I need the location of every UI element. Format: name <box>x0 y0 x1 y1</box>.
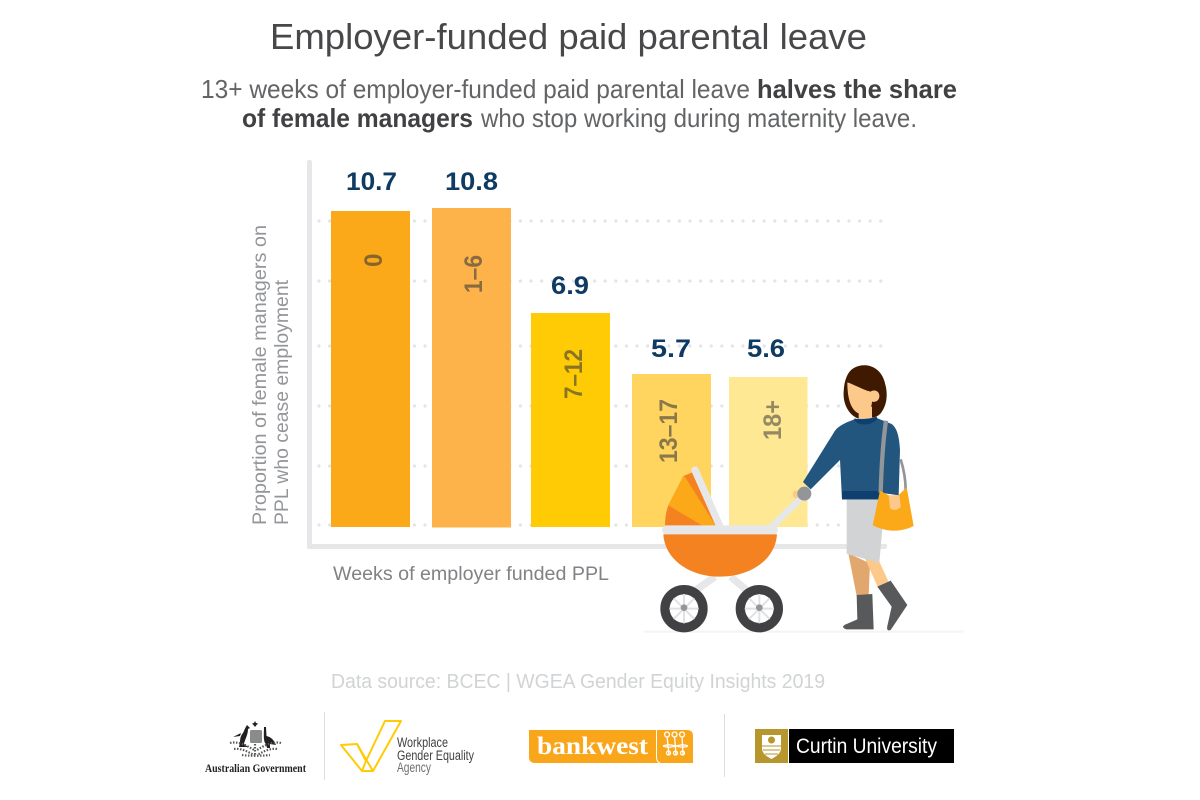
bar: 13-17 weeks <box>632 335 711 527</box>
logo: Bankwest: bankwest <box>537 733 649 760</box>
icon: bankwest symbol <box>663 732 688 755</box>
divider: government and WGEA <box>324 712 325 780</box>
bar: 7-12 weeks: 7–12 <box>560 349 588 399</box>
logo: Workplace Gender Equality Agency: Gender Equality <box>397 748 474 763</box>
logo: Curtin University <box>755 729 954 763</box>
subtitle <box>201 74 957 133</box>
bag <box>873 487 914 531</box>
bar: 1-6 weeks: 10.8 <box>445 168 498 196</box>
y axis label: PPL who cease employment <box>271 279 293 525</box>
subtitle: 13+ weeks of employer-funded paid parental leave <box>201 74 750 104</box>
y axis label: Proportion of female managers on <box>249 225 271 525</box>
logo: Workplace Gender Equality Agency: Agency <box>397 760 431 775</box>
hair back <box>844 365 887 419</box>
bar: 18+ weeks: 18+ <box>759 400 787 440</box>
bar: 13-17 weeks: 13–17 <box>655 399 683 463</box>
subtitle: of female managers <box>242 103 473 133</box>
bar: 13-17 weeks: 5.7 <box>651 335 691 363</box>
grid dots <box>319 221 886 525</box>
arm hand back <box>793 490 799 498</box>
icon: Curtin shield <box>762 735 781 759</box>
bar: 1-6 weeks: 1–6 <box>460 255 488 293</box>
logo: Workplace Gender Equality Agency: Workplace <box>397 735 448 750</box>
logo: Bankwest <box>529 730 693 763</box>
bar: 18+ weeks: 5.6 <box>747 335 785 363</box>
ground shadow <box>643 631 963 633</box>
logo: Curtin University: Curtin University <box>796 735 937 758</box>
pram grip <box>797 487 811 501</box>
chart axes <box>307 160 887 549</box>
y axis label <box>249 225 293 525</box>
bar: 18+ weeks <box>729 335 808 527</box>
bag strap <box>881 421 886 493</box>
data source: Data source: BCEC | WGEA Gender Equity Insights 2019 <box>331 671 825 693</box>
title: Employer-funded paid parental leave <box>270 16 867 57</box>
bar: 0 weeks: 0 <box>360 254 388 267</box>
sweater <box>803 418 900 499</box>
logo: Australian Government: Australian Government <box>205 763 306 775</box>
subtitle: halves the share <box>757 74 957 104</box>
illustration: woman with pram <box>643 365 963 633</box>
skirt <box>847 498 885 563</box>
bar: 7-12 weeks: 6.9 <box>551 272 589 300</box>
logo: Workplace Gender Equality Agency <box>341 721 474 775</box>
boots <box>843 594 874 629</box>
subtitle: who stop working during maternity leave. <box>480 103 917 133</box>
x axis label: Weeks of employer funded PPL <box>333 563 609 585</box>
icon: woman <box>793 365 914 630</box>
logo: Australian Government <box>205 721 306 775</box>
bar: 7-12 weeks <box>531 272 610 527</box>
divider: Bankwest and Curtin <box>724 714 725 777</box>
legs <box>848 553 870 596</box>
bar: 1-6 weeks <box>432 168 511 528</box>
bar: 0 weeks: 10.7 <box>346 168 397 196</box>
bar: 0 weeks <box>331 168 410 527</box>
icon: pram <box>662 470 803 628</box>
neck and face <box>859 407 872 418</box>
icon: coat of arms <box>230 721 281 756</box>
